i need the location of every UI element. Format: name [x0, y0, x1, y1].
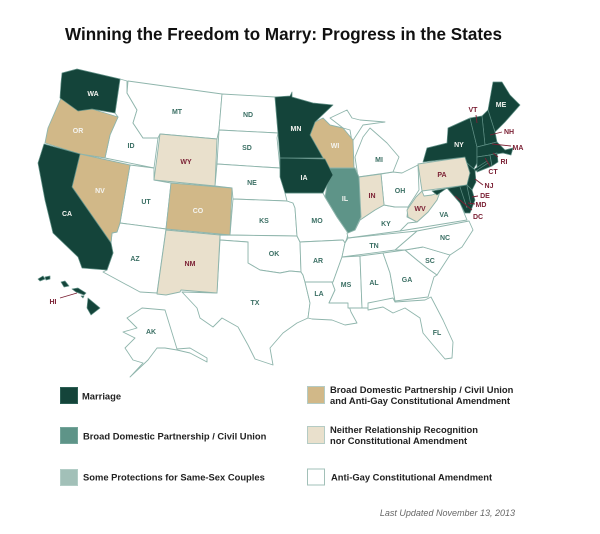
state: OK: OK	[269, 251, 279, 258]
label: NH: NH	[504, 129, 514, 136]
state: WI: WI	[331, 143, 339, 150]
state: AL: AL	[369, 280, 379, 287]
state: CA: CA	[62, 211, 72, 218]
label: VT	[469, 107, 478, 123]
state: AK: AK	[146, 329, 156, 336]
state: IL	[325, 168, 361, 233]
state: UT: UT	[141, 199, 151, 206]
state: WA: WA	[87, 91, 99, 98]
title: Winning the Freedom to Marry: Progress in the States	[65, 24, 502, 44]
map of states	[38, 69, 520, 377]
legend: neither	[308, 424, 478, 446]
legend	[60, 384, 514, 486]
state: NV	[72, 154, 130, 243]
state: MS: MS	[341, 282, 352, 289]
state: RI	[490, 153, 498, 166]
state: IN	[359, 174, 384, 220]
state: ND: ND	[243, 112, 253, 119]
state: VA	[400, 188, 467, 231]
state: FL: FL	[433, 330, 442, 337]
state: WA	[60, 69, 120, 113]
state: IN: IN	[368, 193, 376, 200]
state: UT	[120, 165, 171, 229]
state: MN	[275, 92, 333, 158]
state: MT: MT	[172, 109, 183, 116]
state: NV: NV	[95, 188, 105, 195]
label: VT: VT	[469, 107, 478, 114]
legend: domestic partnership: Broad Domestic Partnership / Civil Union	[83, 430, 267, 442]
label: DE: DE	[480, 193, 490, 200]
state: NM	[157, 230, 220, 295]
state: KY	[347, 205, 417, 238]
state: NE: NE	[247, 180, 257, 187]
state: ME: ME	[496, 102, 507, 109]
legend: domestic partnership	[60, 428, 267, 444]
state: TN	[342, 231, 417, 257]
state: MO: MO	[311, 218, 323, 225]
state: OR: OR	[73, 128, 83, 135]
state: AZ	[103, 223, 166, 293]
state: KS: KS	[259, 218, 269, 225]
state: NM: NM	[185, 261, 196, 268]
state: HI	[38, 276, 100, 315]
state: GA: GA	[402, 277, 412, 284]
label: DC	[455, 196, 483, 221]
legend: some protections: Some Protections for Same-Sex Couples	[83, 472, 265, 482]
state: AZ: AZ	[130, 256, 140, 263]
label: CT	[485, 158, 498, 176]
state: MI: MI	[375, 157, 383, 164]
label: MA	[492, 144, 523, 152]
legend: anti-gay amendment	[308, 469, 492, 485]
label: HI: HI	[50, 299, 57, 306]
state: VA: VA	[439, 212, 449, 219]
state: OH: OH	[395, 188, 405, 195]
label: DE	[472, 193, 490, 200]
state: TN: TN	[369, 243, 379, 250]
legend: partnership and amendment	[308, 384, 514, 406]
state: WI	[310, 118, 354, 168]
label: NJ: NJ	[485, 183, 494, 190]
state: LA: LA	[314, 291, 324, 298]
legend: partnership and amendment: and Anti-Gay Constitutional Amendment	[330, 395, 510, 406]
state: MD DE DC	[432, 185, 475, 213]
state: NJ	[467, 163, 476, 190]
legend: marriage: Marriage	[82, 390, 121, 402]
state: ND	[219, 94, 278, 133]
legend: some protections	[60, 470, 265, 486]
state: AR	[300, 240, 345, 282]
legend: partnership and amendment: Broad Domestic Partnership / Civil Union	[330, 384, 514, 395]
state: KS	[230, 199, 297, 236]
state: NY: NY	[454, 142, 464, 149]
legend: neither: Neither Relationship Recognition	[330, 424, 478, 435]
state: FL	[368, 297, 453, 359]
state: NE	[215, 164, 293, 203]
state: CO: CO	[193, 208, 204, 215]
state: NY	[423, 118, 477, 170]
state: GA	[383, 250, 437, 301]
state: NH	[482, 110, 497, 145]
label: MD	[468, 202, 486, 209]
state: OH	[381, 165, 419, 207]
label: DC: DC	[473, 214, 483, 221]
state: ME	[488, 82, 520, 132]
state: NC: NC	[440, 235, 450, 242]
state: WY	[154, 134, 217, 186]
state: MO	[285, 193, 348, 243]
label: MD: MD	[476, 202, 486, 209]
state: OR	[45, 98, 118, 158]
last updated note: Last Updated November 13, 2013	[380, 508, 515, 518]
state: IL: IL	[342, 196, 349, 203]
state: NC	[395, 221, 473, 255]
legend: marriage	[60, 388, 121, 404]
legend: neither: nor Constitutional Amendment	[330, 435, 467, 446]
label: NH	[490, 129, 514, 136]
state: PA	[418, 157, 470, 191]
label: RI: RI	[500, 159, 508, 166]
state: SD: SD	[242, 145, 252, 152]
state: WV	[407, 191, 440, 222]
state: CO	[166, 183, 232, 235]
state: IA	[280, 158, 333, 193]
state: CA	[38, 144, 113, 270]
state: AL	[360, 253, 395, 308]
label: MA: MA	[513, 145, 523, 152]
state: MI	[330, 110, 399, 177]
state: OK	[220, 235, 301, 273]
state: CT	[477, 155, 492, 172]
long island	[473, 161, 488, 171]
state: SC: SC	[425, 258, 435, 265]
state: IA: IA	[300, 175, 308, 182]
state: KY: KY	[381, 221, 391, 228]
state: AR: AR	[313, 258, 323, 265]
state: TX	[182, 240, 310, 365]
state: ID: ID	[128, 143, 134, 150]
state: LA	[305, 282, 357, 325]
state labels with leader lines	[50, 107, 523, 306]
state: MS	[329, 256, 362, 308]
state: TX: TX	[251, 300, 260, 307]
state: ID	[105, 79, 158, 168]
label: HI	[50, 293, 77, 306]
state: MA	[477, 142, 513, 157]
label: RI	[493, 153, 508, 166]
state: MN: MN	[291, 126, 301, 133]
label: NJ	[475, 179, 494, 190]
legend: anti-gay amendment: Anti-Gay Constitutional Amendment	[331, 472, 492, 482]
state: SD	[217, 130, 280, 168]
state: AK	[123, 308, 207, 377]
state: MT	[127, 81, 222, 139]
state: VT	[470, 116, 485, 147]
state: WY: WY	[180, 159, 192, 166]
state: WV: WV	[414, 206, 426, 213]
label: CT: CT	[488, 169, 498, 176]
state: SC	[405, 247, 450, 275]
state: PA: PA	[437, 172, 447, 179]
